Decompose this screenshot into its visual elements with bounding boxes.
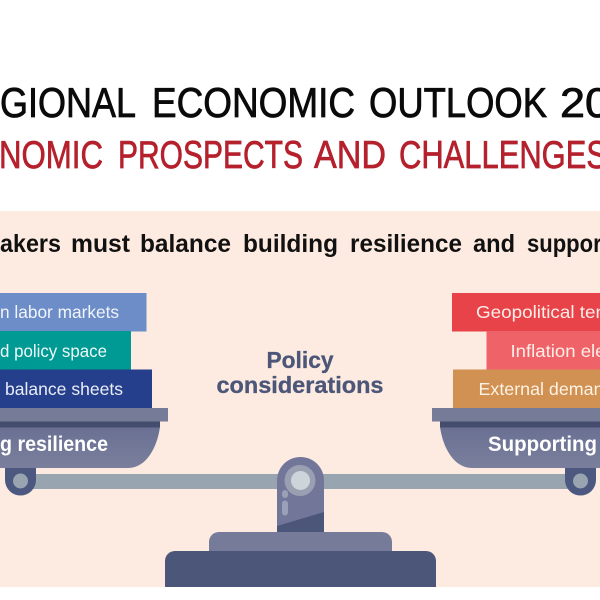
headline: and (473, 230, 515, 258)
left pan hinge (5, 468, 36, 496)
left scale pan: g resilience (0, 433, 108, 456)
subtitle: PROSPECTS (118, 134, 303, 177)
subtitle: NOMIC (0, 134, 103, 177)
right stack of books: External deman (478, 379, 600, 399)
headline: akers (0, 230, 61, 258)
scale stand (165, 457, 436, 587)
headline: resilience (350, 230, 462, 258)
right stack of books: Geopolitical ten (476, 302, 600, 322)
left scale pan (0, 408, 168, 496)
headline: building (243, 230, 338, 258)
right scale pan (432, 408, 600, 496)
right pan hinge (565, 468, 596, 496)
headline: balance (140, 230, 231, 258)
left stack of books (0, 293, 152, 408)
right stack of books (452, 293, 600, 408)
title: OUTLOOK (369, 79, 547, 126)
right stack of books: Inflation ele (510, 341, 600, 361)
center label: policy considerations (216, 347, 384, 398)
title (0, 79, 600, 126)
headline (0, 230, 600, 258)
background panel (0, 211, 600, 587)
left stack of books: n labor markets (0, 302, 119, 322)
title: ECONOMIC (152, 79, 355, 126)
left stack of books: balance sheets (5, 379, 123, 399)
left stack of books: d policy space (0, 341, 107, 361)
center label: policy considerations: considerations (216, 372, 384, 398)
center label: policy considerations: Policy (266, 347, 334, 373)
scale beam (20, 474, 580, 489)
title: GIONAL (0, 79, 136, 126)
subtitle: AND (314, 134, 386, 177)
right scale pan: Supporting (488, 433, 597, 456)
headline: must (71, 230, 131, 258)
subtitle (0, 134, 600, 177)
